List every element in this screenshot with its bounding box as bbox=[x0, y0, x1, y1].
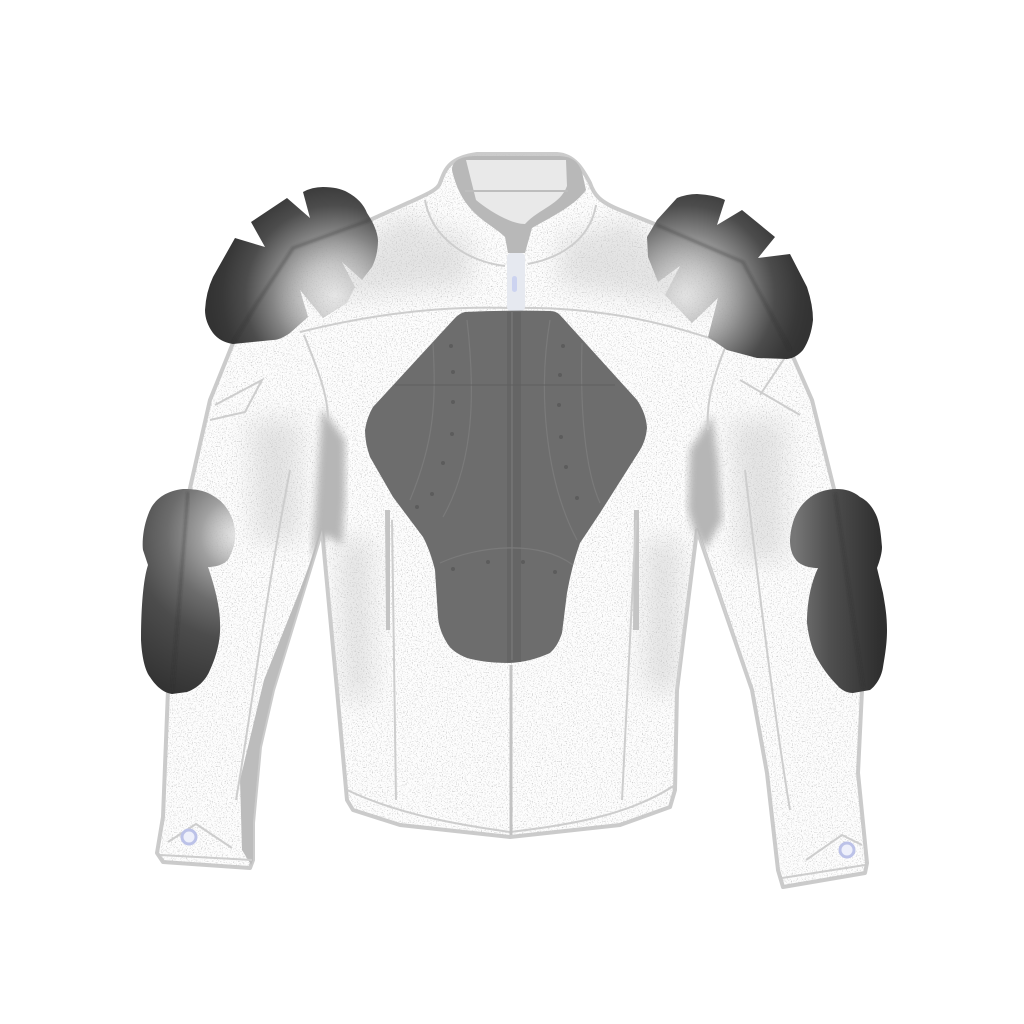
left sleeve inner band bbox=[240, 554, 314, 864]
protector cross line bbox=[395, 384, 615, 386]
zipper glint bbox=[512, 276, 517, 292]
armour: right elbow pad bbox=[790, 489, 887, 693]
zipper pull bbox=[507, 253, 525, 311]
infographic: motorcycle jacket with armour bbox=[141, 152, 887, 889]
right sleeve inner band bbox=[701, 538, 736, 640]
armour: left elbow pad bbox=[141, 489, 235, 694]
underarm shadow right bbox=[688, 415, 722, 550]
collar interior bbox=[452, 156, 586, 253]
jacket bbox=[150, 150, 880, 890]
zipper bbox=[510, 665, 512, 835]
collar strap bbox=[465, 190, 568, 192]
left cuff snap bbox=[182, 830, 196, 844]
right cuff snap bbox=[840, 843, 854, 857]
left elbow ridge bbox=[172, 492, 188, 692]
right shoulder pad ridge bbox=[657, 225, 790, 350]
armour: right shoulder pad bbox=[647, 194, 813, 359]
armour: left shoulder pad bbox=[205, 187, 378, 344]
worn patches bbox=[250, 215, 785, 700]
protector ribs bbox=[410, 312, 600, 660]
collar lining bbox=[466, 160, 567, 224]
right elbow ridge bbox=[835, 493, 863, 688]
protector spine bbox=[507, 312, 521, 662]
armour: chest and back protector bbox=[365, 311, 647, 663]
jacket shading bbox=[150, 150, 880, 890]
protector dots bbox=[415, 344, 579, 574]
left shoulder pad ridge bbox=[233, 220, 370, 343]
jacket seams bbox=[160, 200, 865, 878]
right pocket band bbox=[633, 510, 639, 630]
underarm shadow left bbox=[312, 408, 345, 560]
jacket body silhouette bbox=[157, 154, 867, 887]
speckle bbox=[150, 150, 880, 890]
left pocket band bbox=[385, 510, 390, 630]
